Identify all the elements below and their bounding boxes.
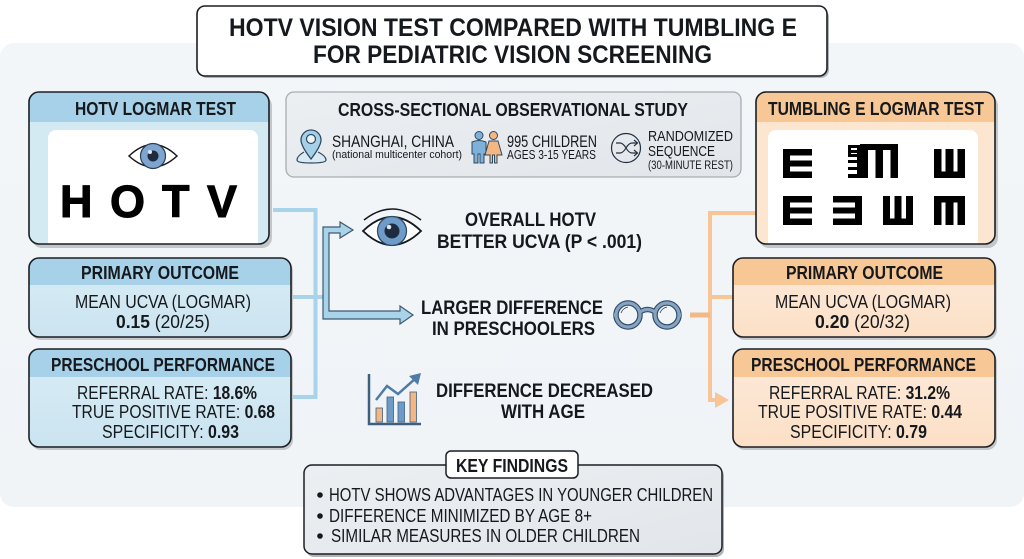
connector: blue lines from HOTV panels [273,210,326,397]
randomization text [648,128,733,172]
tumbling E optotypes [783,144,965,225]
icon: glasses [614,303,681,327]
title [197,6,829,78]
key findings list: DIFFERENCE MINIMIZED BY AGE 8+ [329,506,592,526]
panel: HOTV logMAR test [29,92,272,255]
heading: Tumbling E logMAR test: TUMBLING E LOGMAR TEST [768,99,984,119]
icon: eye [129,144,177,168]
location text: SHANGHAI, CHINA [332,133,454,151]
panel: HOTV primary outcome [29,258,293,340]
panel: HOTV primary outcome: MEAN UCVA (LOGMAR) [75,292,251,312]
randomization text: (30-MINUTE REST) [648,160,733,172]
participants text [507,133,597,162]
icon: shuffle [612,134,640,162]
key findings list: SIMILAR MEASURES IN OLDER CHILDREN [331,526,640,546]
panel: Tumbling E primary outcome: PRIMARY OUTCOME [786,263,943,283]
panel: HOTV preschool performance: PRESCHOOL PERFORMANCE [51,355,275,375]
connector: orange lines from Tumbling E panels [690,213,756,408]
panel: HOTV primary outcome: PRIMARY OUTCOME [81,263,239,283]
panel: HOTV preschool performance: TRUE POSITIVE RATE: 0.68 [72,402,275,422]
title: FOR PEDIATRIC VISION SCREENING [313,41,712,69]
finding: larger difference [421,297,603,340]
panel: Tumbling E preschool performance: SPECIFICITY: 0.79 [790,422,927,442]
participants text: AGES 3-15 YEARS [507,147,596,162]
finding: overall HOTV [437,209,642,253]
panel: key findings [304,451,724,557]
title: HOTV VISION TEST COMPARED WITH TUMBLING E [229,14,797,42]
panel: Tumbling E preschool performance [733,349,997,450]
icon: location pin [297,130,326,163]
panel: Tumbling E logMAR test [756,92,998,255]
heading: study design: CROSS-SECTIONAL OBSERVATIONAL STUDY [338,100,688,120]
heading: HOTV logMAR test: HOTV LOGMAR TEST [75,99,236,119]
panel: HOTV primary outcome: 0.15 (20/25) [116,312,210,332]
chart letters: HOTV: HOTV [60,176,237,227]
panel: Tumbling E preschool performance: REFERRAL RATE: 31.2% [769,383,950,403]
panel: study design [286,92,741,177]
key findings list: HOTV SHOWS ADVANTAGES IN YOUNGER CHILDREN [329,485,713,505]
panel: Tumbling E preschool performance: PRESCHOOL PERFORMANCE [751,355,976,375]
finding: difference decreased [436,380,653,423]
icon: large eye [363,209,421,246]
finding: overall HOTV: BETTER UCVA (P < .001) [437,231,642,253]
location text: (national multicenter cohort) [332,149,462,161]
panel: HOTV preschool performance: SPECIFICITY: 0.93 [102,422,239,442]
key findings list [317,485,713,546]
panel: Tumbling E primary outcome [733,258,997,340]
finding: difference decreased: DIFFERENCE DECREASED [436,380,653,402]
randomization text: SEQUENCE [648,143,715,160]
finding: larger difference: LARGER DIFFERENCE [421,297,603,319]
randomization text: RANDOMIZED [648,128,733,145]
heading: key findings: KEY FINDINGS [456,456,568,476]
panel: Tumbling E primary outcome: 0.20 (20/32) [815,312,910,332]
heading: key findings [446,451,578,478]
panel: HOTV preschool performance [29,349,293,450]
panel: Tumbling E primary outcome: MEAN UCVA (LOGMAR) [775,292,951,312]
arrows: to overall HOTV and larger difference [323,222,413,324]
finding: overall HOTV: OVERALL HOTV [465,209,596,231]
icon: children [472,132,502,163]
participants text: 995 CHILDREN [507,133,597,151]
panel: Tumbling E preschool performance: TRUE POSITIVE RATE: 0.44 [758,402,962,422]
panel: HOTV preschool performance: REFERRAL RATE: 18.6% [77,383,257,403]
finding: difference decreased: WITH AGE [501,401,585,423]
location text [332,133,462,161]
finding: larger difference: IN PRESCHOOLERS [432,318,595,340]
icon: bar chart with rising arrow [369,373,421,424]
